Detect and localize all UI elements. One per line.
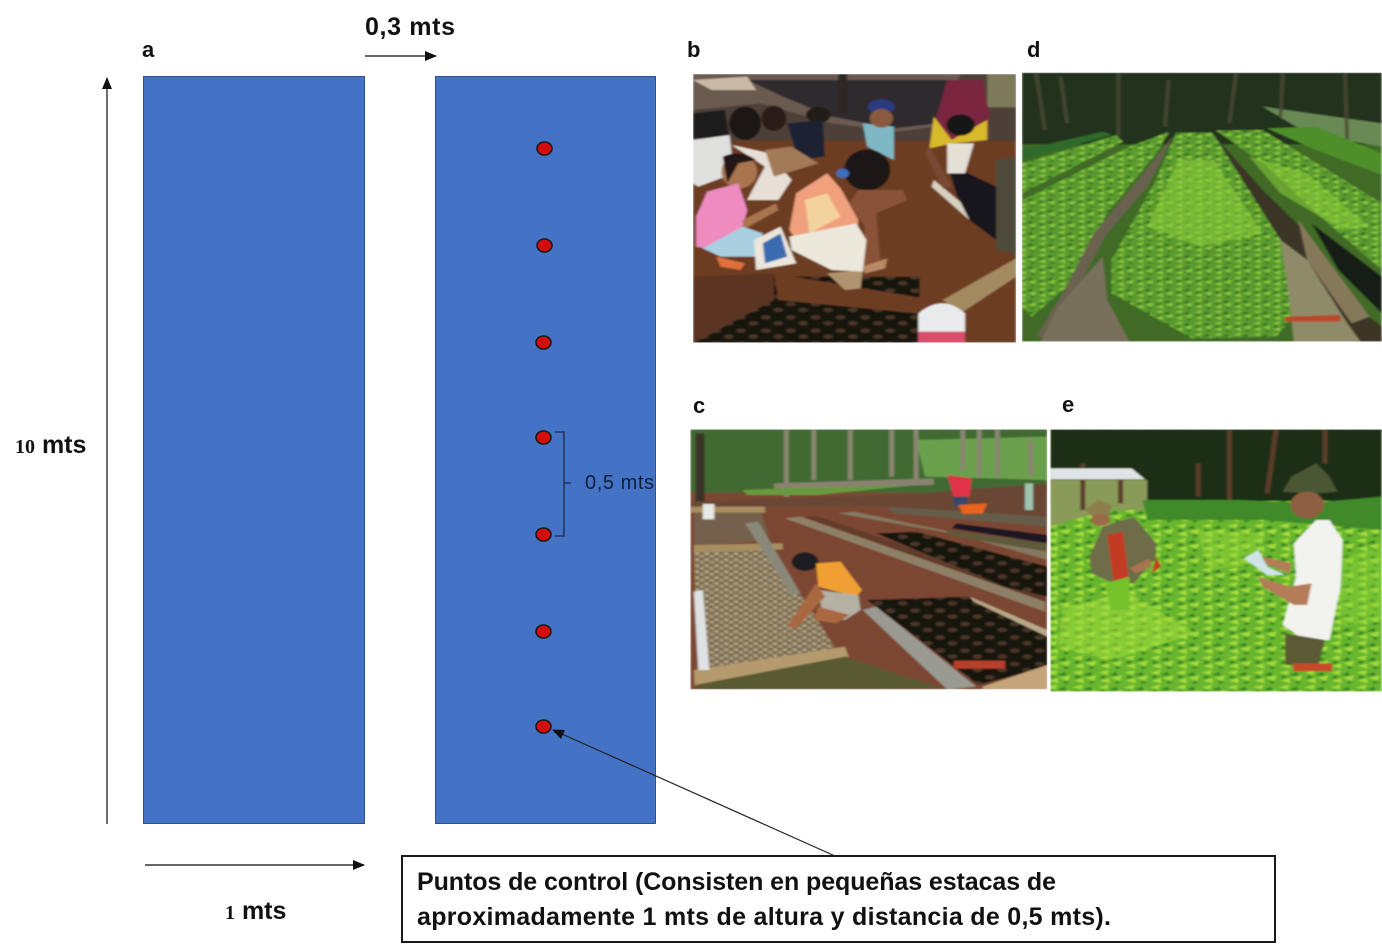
dimension: 0,3 mts arrow	[365, 13, 455, 56]
callout: puntos de control	[402, 856, 1275, 942]
bracket: 0,5 mts	[555, 432, 654, 536]
photo d: tree nursery beds	[1022, 73, 1382, 342]
photo label c: c	[693, 393, 705, 418]
dimension: 1 mts horizontal arrow: 1 mts	[225, 897, 286, 925]
bracket: 0,5 mts: 0,5 mts	[585, 472, 654, 494]
callout: puntos de control: aproximadamente 1 mts de altura y distancia de 0,5 mts).	[417, 903, 1111, 931]
bags on board	[932, 180, 974, 220]
girl with cap	[863, 123, 894, 160]
dimension: 0,3 mts arrow: 0,3 mts	[365, 13, 455, 41]
man in white shirt with hat	[1283, 463, 1337, 494]
girl in pink	[721, 155, 757, 188]
man with cap	[1085, 500, 1112, 517]
panel a label: a	[142, 37, 155, 62]
background children	[729, 107, 761, 140]
woman in floral top	[844, 149, 890, 191]
dimension: 10 mts vertical arrow: 10 mts	[15, 431, 86, 459]
gravel seedbed	[694, 548, 836, 673]
photo label e: e	[1062, 392, 1074, 417]
workers background	[947, 475, 972, 497]
photo label b: b	[687, 37, 700, 62]
control points	[536, 142, 552, 733]
logs and pot beds	[785, 517, 1045, 612]
photo e: two men inspecting seedlings	[1050, 429, 1382, 692]
panel a: blue plot right with control points	[436, 76, 656, 824]
photo b: children filling seedling bags	[693, 74, 1016, 343]
callout: puntos de control: Puntos de control (Consisten en pequeñas estacas de	[417, 868, 1056, 896]
panel a: blue plot left	[144, 76, 364, 824]
woman crouching	[792, 552, 818, 571]
seedling bags	[693, 277, 920, 343]
photo label d: d	[1027, 37, 1040, 62]
callout leader arrow	[553, 730, 835, 856]
photo c: woman working in seedbeds	[690, 429, 1047, 689]
foliage highlights	[1058, 593, 1196, 660]
adult in red shirt	[936, 79, 990, 140]
